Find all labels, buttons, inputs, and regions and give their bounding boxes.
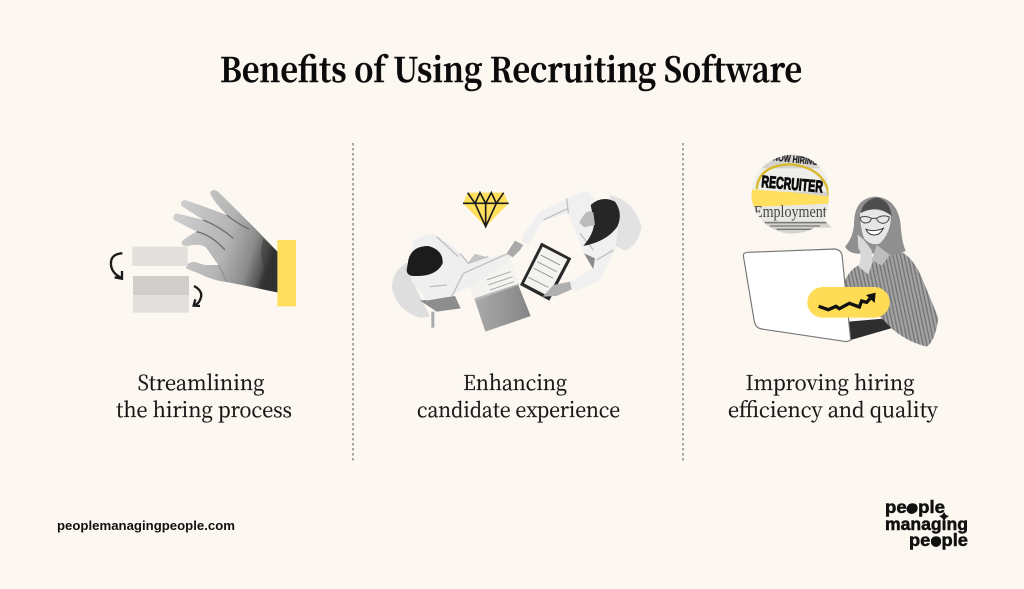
panel: streamlining the hiring process	[111, 190, 296, 423]
icon: chair left	[392, 263, 430, 318]
icon: woman body	[845, 250, 938, 347]
icon: hand	[173, 190, 277, 292]
icon: chair right	[610, 195, 642, 251]
icon: person right	[522, 191, 620, 297]
icon: woman hair	[845, 197, 906, 256]
icon: clipboard	[520, 243, 571, 301]
icon: left arrow	[111, 253, 122, 279]
illustration: handshake over documents	[392, 191, 642, 332]
icon: open folder	[463, 259, 531, 332]
label: the hiring process	[116, 393, 292, 423]
icon: upper block	[132, 247, 188, 266]
label: Improving hiring	[746, 366, 915, 396]
icon: newspaper speech bubble: RECRUITER	[761, 172, 824, 196]
logo: people	[885, 497, 945, 517]
icon: newspaper speech bubble	[750, 152, 832, 234]
icon: diamond	[463, 193, 509, 227]
icon: handshake	[507, 241, 523, 257]
label: efficiency and quality	[728, 393, 939, 423]
icon: right arrow	[194, 286, 201, 306]
icon: yellow growth pill	[807, 287, 890, 318]
illustration: smiling recruiter at laptop	[743, 152, 938, 347]
icon: lower block	[133, 276, 189, 313]
icon: newspaper speech bubble: NOW HIRING	[772, 152, 818, 168]
icon: woman face and hand	[858, 210, 891, 274]
logo: people	[909, 530, 968, 550]
panel: improving hiring efficiency and quality	[728, 152, 939, 423]
icon: yellow cuff	[277, 240, 296, 306]
footer url: peoplemanagingpeople.com	[57, 518, 235, 533]
icon: glasses and smile	[860, 216, 889, 235]
label: candidate experience	[417, 393, 620, 423]
icon: person left	[407, 234, 511, 312]
title: Benefits of Using Recruiting Software	[220, 43, 802, 92]
panel: enhancing candidate experience	[392, 191, 642, 423]
logo	[885, 497, 968, 550]
label: Enhancing	[463, 366, 567, 396]
icon: laptop	[743, 249, 851, 342]
icon: newspaper speech bubble: Employment	[754, 202, 827, 221]
logo: managing	[885, 514, 968, 534]
label: Streamlining	[138, 366, 265, 396]
illustration: hand moving blocks	[111, 190, 296, 313]
